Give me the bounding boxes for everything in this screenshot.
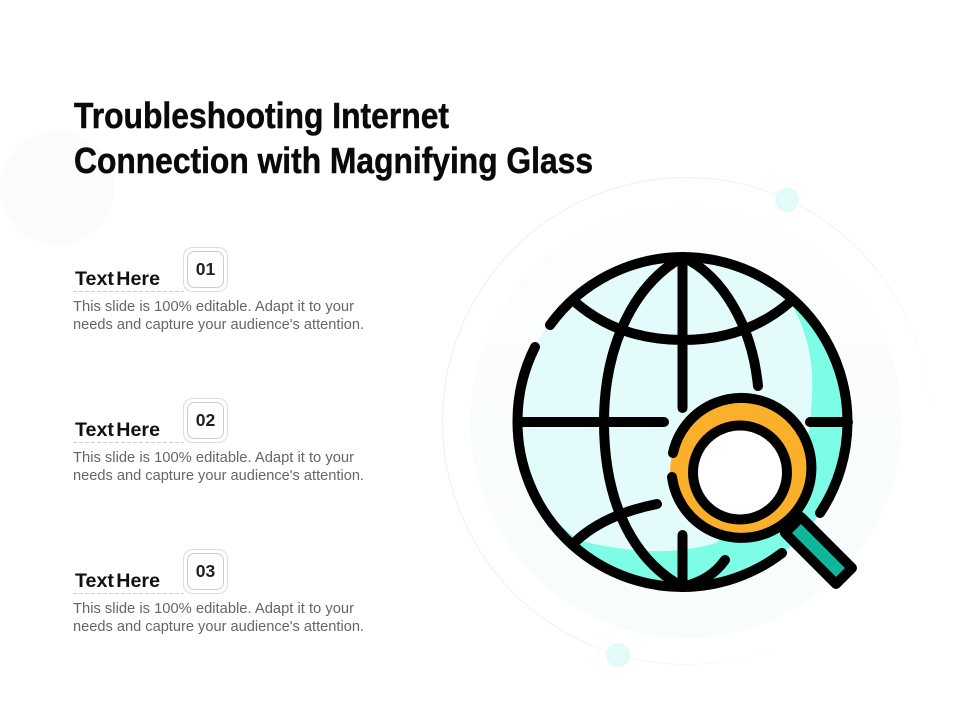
badge 01 [184,248,228,292]
badge 02 [184,398,228,442]
body 02: needs and capture your audience's attention. [73,468,364,484]
body 01 [73,299,364,333]
badge 03 [184,550,228,594]
backdrop: rings and dots [442,178,930,667]
body 02 [73,450,364,484]
body 03: needs and capture your audience's attention. [73,619,364,635]
body 02: This slide is 100% editable. Adapt it to your [73,450,354,466]
item 01 [73,248,364,333]
badge 02: 02 [196,410,215,430]
globe fill [518,257,848,587]
heading 03: Text Here [75,571,160,592]
item 02 [73,398,364,484]
heading 02: Text Here [75,420,160,441]
body 03: This slide is 100% editable. Adapt it to your [73,601,354,617]
magnifying glass [670,398,852,584]
body 01: This slide is 100% editable. Adapt it to your [73,299,354,315]
icon: globe with magnifying glass [517,257,852,587]
globe outline [517,257,848,587]
badge 03: 03 [196,561,215,581]
handle [785,517,852,584]
title [74,95,593,181]
globe grid lines [520,257,848,587]
heading 01: Text Here [75,269,160,290]
title: Connection with Magnifying Glass [74,140,593,181]
body 03 [73,601,364,635]
item 03 [73,550,364,635]
lens rim [670,402,810,542]
decorative circle: top left [0,131,114,245]
body 01: needs and capture your audience's attention. [73,317,364,333]
badge 01: 01 [196,259,215,279]
lens glass [693,426,787,520]
title: Troubleshooting Internet [74,95,449,136]
